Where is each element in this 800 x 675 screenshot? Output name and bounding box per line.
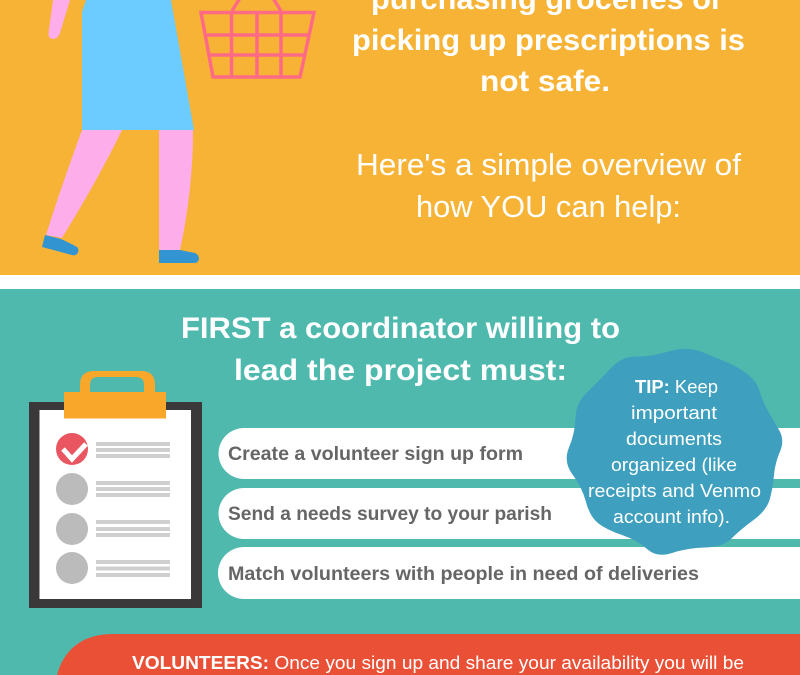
task pill: match volunteers [218, 547, 800, 599]
task pill: sign up form [218, 428, 800, 479]
intro text: bold: picking up prescriptions is [352, 24, 745, 57]
callout: tip: receipts and Venmo [588, 480, 761, 501]
heading: lead the project must: [234, 354, 567, 387]
intro text: call to help: how YOU can help: [416, 189, 681, 224]
callout: tip [567, 349, 782, 555]
panel: orange intro [0, 0, 800, 275]
intro text: call to help: Here's a simple overview of [356, 147, 741, 182]
panel: teal coordinator section [0, 289, 800, 675]
task pill: match volunteers: Match volunteers with people in need of deliveries [228, 564, 699, 585]
task pill: needs survey: Send a needs survey to your parish [228, 504, 552, 525]
intro text: bold [352, 0, 745, 98]
icon: clipboard checklist [29, 371, 202, 608]
intro text: bold: not safe. [480, 65, 610, 98]
heading: FIRST a coordinator willing to [181, 312, 620, 345]
heading [181, 312, 620, 387]
icon: shopping basket [201, 0, 314, 77]
callout: tip: important [631, 402, 717, 423]
callout: tip: organized (like [611, 454, 737, 475]
illustration: woman walking [42, 0, 199, 263]
callout: tip: documents [626, 428, 722, 449]
task pill: sign up form: Create a volunteer sign up form [228, 444, 523, 465]
callout: tip: account info). [613, 506, 730, 527]
task pill: needs survey [218, 488, 800, 539]
panel: volunteers: VOLUNTEERS: Once you sign up and share your availability you will be [132, 653, 744, 673]
panel: volunteers [57, 634, 800, 675]
intro text: call to help [356, 147, 741, 224]
callout: tip: TIP: Keep [635, 376, 718, 397]
